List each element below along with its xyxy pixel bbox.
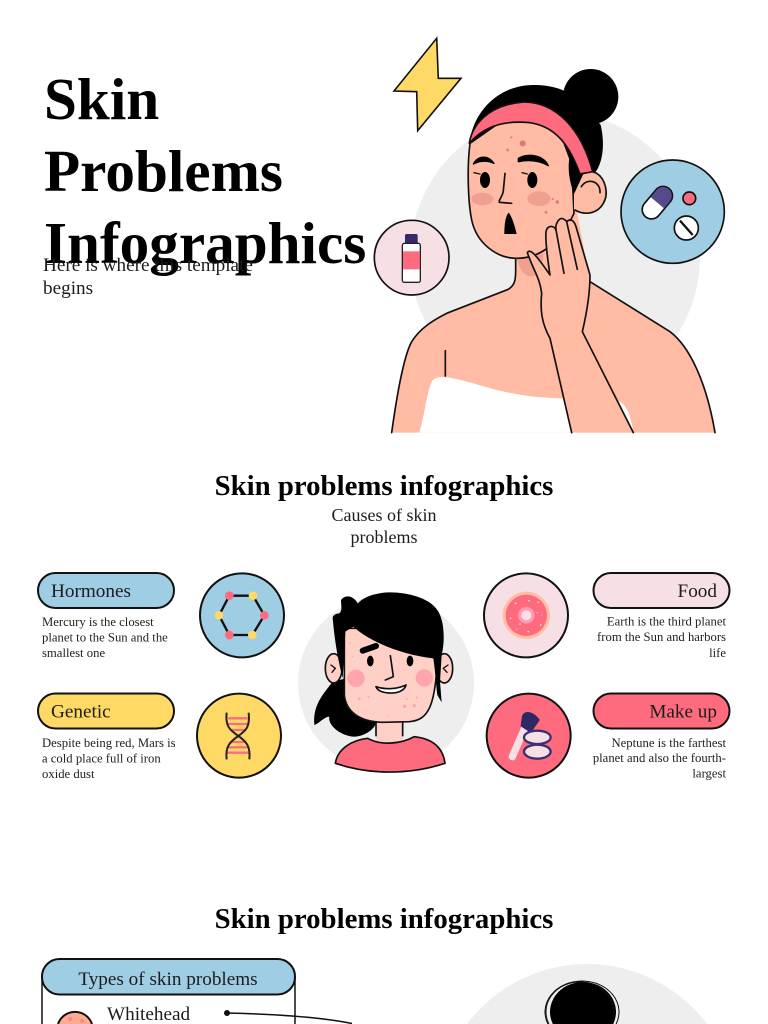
title (44, 66, 366, 276)
icon: hormones molecule (200, 573, 284, 657)
text: food description (597, 614, 726, 660)
label: food (594, 573, 730, 608)
text: make up description: largest (692, 766, 726, 780)
avatar: smiling person (298, 592, 474, 772)
icon: make up (487, 694, 571, 778)
title: Infographics (44, 210, 366, 276)
illustration: woman with acne (392, 69, 715, 433)
heading: types section: Skin problems infographics (215, 903, 553, 935)
text: genetic description: Despite being red, Mars is (42, 736, 176, 750)
icon: pills badge (621, 160, 724, 263)
title: Problems (44, 138, 283, 204)
subtitle (43, 255, 253, 299)
label: genetic (38, 694, 174, 728)
panel: types of skin problems (42, 959, 295, 1024)
text: hormones description: Mercury is the closest (42, 615, 154, 629)
icon: bottle badge (374, 220, 449, 295)
icon: whitehead (58, 1012, 92, 1024)
icon: lightning bolt (394, 38, 461, 131)
text: make up description: planet and also the fourth- (593, 751, 726, 765)
panel header: Types of skin problems (78, 969, 258, 990)
text: genetic description (42, 736, 176, 781)
icon: donut (484, 573, 568, 657)
connector line: whitehead (224, 1010, 352, 1024)
title: Skin (44, 66, 159, 132)
text: food description: Earth is the third planet (607, 614, 726, 628)
illustration: bottom figure circle and hair bun (467, 964, 707, 1024)
text: make up description: Neptune is the farthest (611, 736, 726, 750)
text: food description: from the Sun and harbors (597, 630, 726, 644)
text: genetic description: oxide dust (42, 767, 95, 781)
text: hormones description (42, 615, 168, 660)
subtitle: Here is where this template (43, 255, 253, 276)
text: make up description (593, 736, 726, 780)
text: genetic description: a cold place full of iron (42, 752, 161, 766)
text: food description: life (709, 646, 726, 660)
icon: dna helix (197, 694, 281, 778)
label: hormones (38, 573, 174, 608)
subtitle: begins (43, 278, 93, 299)
label: make up: Make up (649, 702, 717, 722)
subheading: causes of skin problems: problems (350, 527, 418, 547)
panel header (42, 959, 295, 994)
label: make up (594, 694, 730, 728)
heading: causes section: Skin problems infographics (215, 470, 553, 502)
subheading: causes of skin problems (332, 505, 436, 547)
label: food: Food (678, 581, 717, 602)
text: hormones description: smallest one (42, 646, 105, 660)
label: genetic: Genetic (51, 702, 111, 722)
subheading: causes of skin problems: Causes of skin (332, 505, 436, 525)
text: hormones description: planet to the Sun and the (42, 630, 168, 644)
label: hormones: Hormones (51, 581, 131, 602)
